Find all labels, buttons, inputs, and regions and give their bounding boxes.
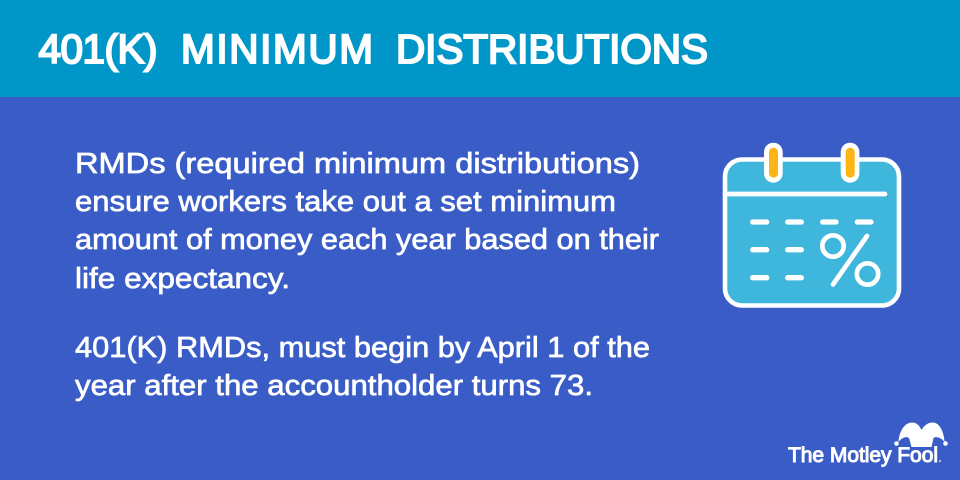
text block: RMD definition: RMDs (required minimum distributions) [75, 148, 640, 180]
calendar binding ring left [764, 143, 783, 183]
text block: RMD deadline: 401(K) RMDs, must begin by April 1 of the [75, 332, 650, 364]
text block: RMD deadline [75, 332, 650, 402]
icon: calendar with percent sign [725, 143, 899, 306]
title: 401(K) [38, 26, 158, 72]
jester hat [894, 422, 948, 447]
wordmark: The Motley Fool [788, 444, 938, 467]
calendar header line [725, 192, 885, 196]
text block: RMD deadline: year after the accountholder turns 73. [75, 370, 593, 402]
header band [0, 0, 960, 97]
title [38, 26, 708, 72]
text block: RMD definition: amount of money each year based on their [75, 224, 659, 256]
text block: RMD definition [75, 148, 659, 295]
logo: The Motley Fool [788, 422, 948, 467]
title: MINIMUM [181, 26, 373, 72]
calendar binding ring right [841, 143, 859, 183]
text block: RMD definition: life expectancy. [75, 263, 290, 295]
percent sign [822, 235, 878, 285]
text block: RMD definition: ensure workers take out a set minimum [75, 186, 616, 218]
title: DISTRIBUTIONS [396, 26, 708, 72]
date dashes [753, 222, 871, 278]
registered dot [939, 460, 941, 462]
